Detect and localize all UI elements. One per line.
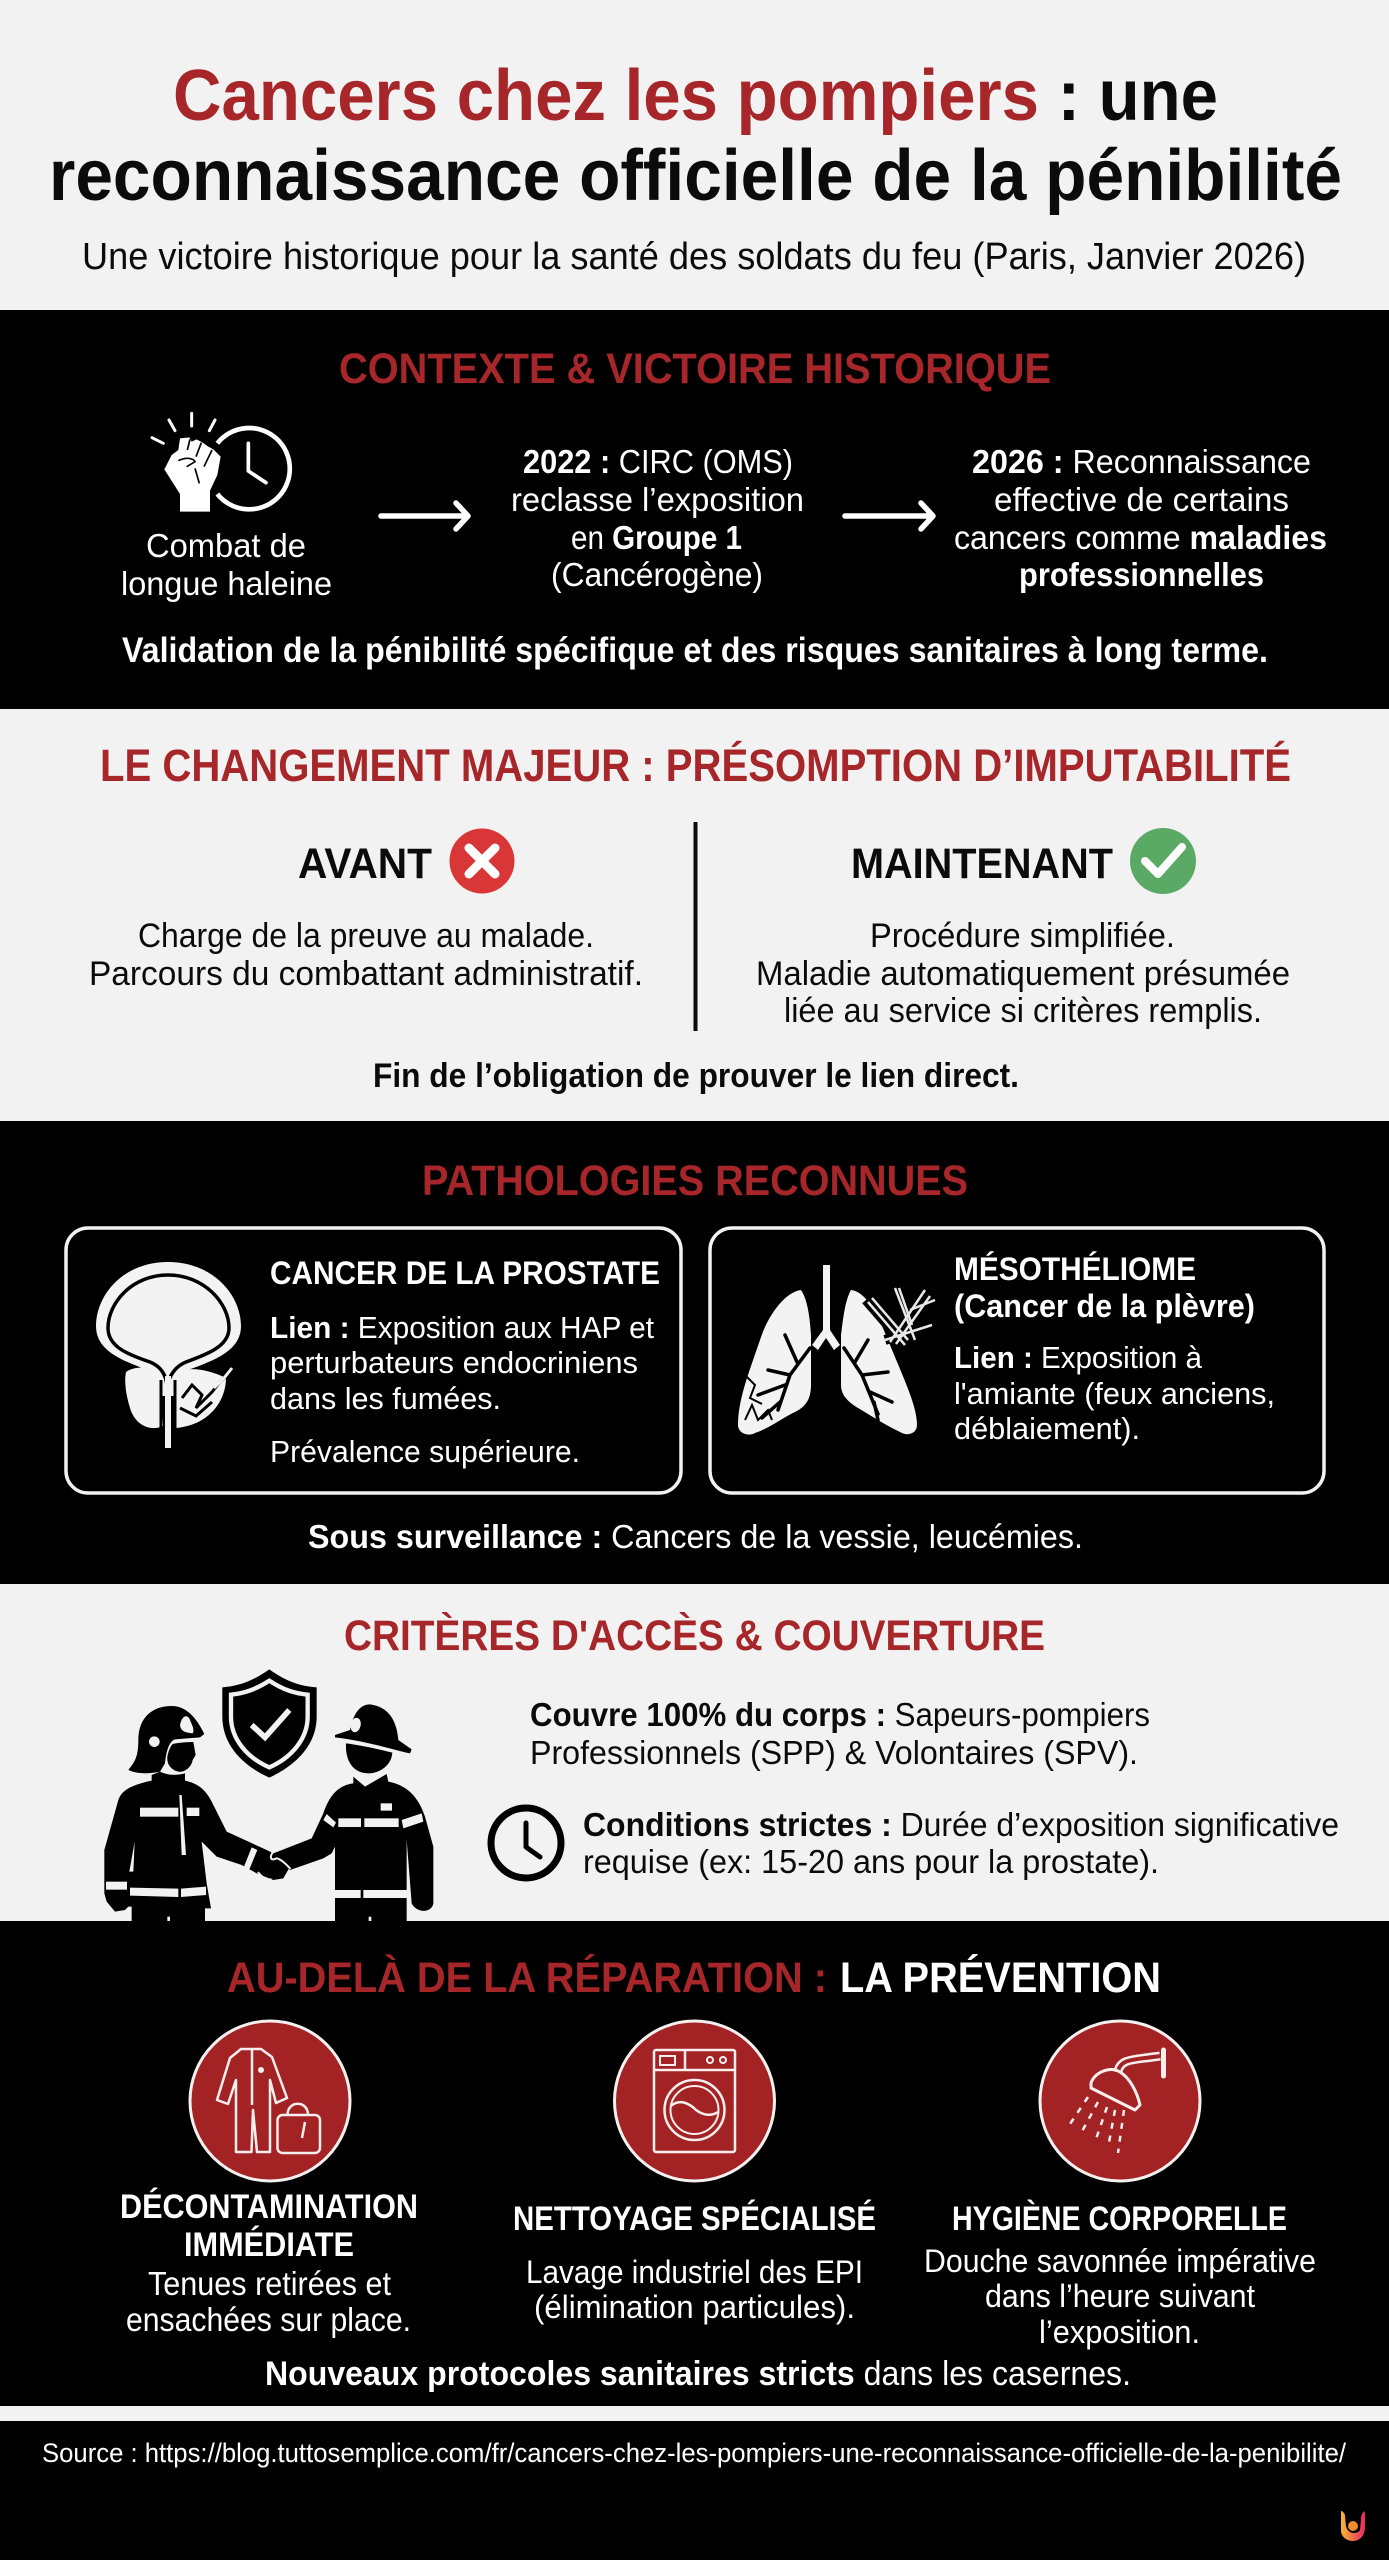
text: validation: Validation de la pénibilité spécifique et des risques sanitaires à long terme. — [122, 631, 1268, 670]
text: source: Source : https://blog.tuttosemplice.com/fr/cancers-chez-les-pompiers-une-reconnaissance-officielle-de-la-penibilite/ — [42, 2438, 1346, 2468]
text: décontamination — [120, 2188, 418, 2338]
panel: contexte et victoire historique — [0, 310, 1389, 709]
text: 2026: effective de certains — [994, 481, 1289, 518]
icon: shower — [1040, 2021, 1200, 2181]
column: avant: Parcours du combattant administratif. — [89, 955, 643, 993]
text: 2022: 2022 : CIRC (OMS) — [523, 443, 793, 480]
icon: shield — [222, 1669, 317, 1778]
text: décontamination: ensachées sur place. — [126, 2301, 411, 2338]
icon: washing machine — [614, 2021, 774, 2181]
text: nettoyage — [513, 2200, 876, 2325]
text: combat de longue haleine: longue haleine — [121, 565, 332, 602]
text: 2026: cancers comme maladies — [954, 519, 1327, 556]
column: maintenant: MAINTENANT — [851, 840, 1113, 888]
text: 2022 — [511, 443, 804, 593]
panel: critères d'accès — [0, 1584, 1389, 1922]
text: combat de longue haleine — [121, 527, 332, 602]
panel: prévention — [0, 1921, 1389, 2406]
card: prostate — [66, 1228, 681, 1493]
column: avant: Charge de la preuve au malade. — [138, 917, 594, 955]
text: mésothéliome: l'amiante (feux anciens, — [954, 1376, 1275, 1411]
text: couvre 100% — [530, 1696, 1150, 1771]
panel: présomption d'imputabilité — [0, 709, 1389, 1121]
text: hygiène: l’exposition. — [1039, 2314, 1200, 2350]
text: décontamination: IMMÉDIATE — [184, 2226, 354, 2264]
heading: prévention — [227, 1954, 1161, 2002]
text: fin de l'obligation: Fin de l’obligation de prouver le lien direct. — [373, 1057, 1019, 1095]
text: nettoyage: (élimination particules). — [534, 2289, 855, 2325]
text: prostate: CANCER DE LA PROSTATE — [270, 1255, 660, 1291]
text: sous surveillance: Sous surveillance : Cancers de la vessie, leucémies. — [308, 1518, 1083, 1555]
heading: prévention: AU-DELÀ DE LA RÉPARATION : — [227, 1954, 827, 2002]
panel: header — [0, 0, 1389, 310]
card: mésothéliome — [710, 1228, 1324, 1493]
text: hygiène — [924, 2200, 1316, 2350]
text: décontamination: Tenues retirées et — [148, 2265, 391, 2302]
heading: contexte: CONTEXTE & VICTOIRE HISTORIQUE — [339, 345, 1051, 393]
text: mésothéliome: Lien : Exposition à — [954, 1340, 1203, 1375]
text: 2022: (Cancérogène) — [551, 556, 763, 593]
heading: prévention: LA PRÉVENTION — [840, 1954, 1161, 2002]
handshake lines — [258, 1852, 290, 1880]
icon: firefighters and shield — [104, 1669, 433, 1922]
text: 2022: en Groupe 1 — [571, 519, 742, 556]
icon: left firefighter — [104, 1706, 290, 1922]
text: couvre 100%: Professionnels (SPP) & Volontaires (SPV). — [530, 1734, 1138, 1771]
icon: right firefighter — [273, 1704, 433, 1922]
subtitle: Une victoire historique pour la santé des soldats du feu (Paris, Janvier 2026) — [82, 236, 1306, 278]
column: hygiène — [924, 2021, 1316, 2350]
text: 2026: 2026 : Reconnaissance — [972, 443, 1311, 480]
icon: fist and clock — [152, 413, 290, 512]
text: hygiène: dans l’heure suivant — [985, 2278, 1255, 2314]
arrow 2 — [845, 503, 933, 529]
text: décontamination: DÉCONTAMINATION — [120, 2188, 418, 2226]
panel: source footer — [0, 2421, 1389, 2560]
column: nettoyage — [513, 2021, 876, 2325]
title: reconnaissance officielle de la pénibilité — [49, 136, 1342, 216]
heading: critères: CRITÈRES D'ACCÈS & COUVERTURE — [344, 1612, 1045, 1660]
column: maintenant: Procédure simplifiée. — [870, 917, 1175, 955]
panel: pathologies reconnues — [0, 1121, 1389, 1584]
title — [49, 56, 1342, 216]
text: 2022: reclasse l’exposition — [511, 481, 804, 518]
text: mésothéliome: MÉSOTHÉLIOME — [954, 1251, 1196, 1287]
text: mésothéliome — [954, 1251, 1275, 1446]
icon: red cross — [450, 828, 514, 894]
separator band — [0, 2406, 1389, 2421]
text: mésothéliome: déblaiement). — [954, 1411, 1140, 1446]
text: mésothéliome: (Cancer de la plèvre) — [954, 1288, 1255, 1324]
text: conditions strictes: requise (ex: 15-20 ans pour la prostate). — [583, 1843, 1159, 1880]
column: maintenant: liée au service si critères remplis. — [784, 992, 1262, 1030]
text: 2026: professionnelles — [1019, 556, 1264, 593]
column: maintenant — [756, 828, 1290, 1030]
column: avant: AVANT — [298, 840, 432, 888]
text: nettoyage: NETTOYAGE SPÉCIALISÉ — [513, 2200, 876, 2238]
heading: pathologies: PATHOLOGIES RECONNUES — [422, 1157, 968, 1205]
text: 2026 — [954, 443, 1327, 593]
icon: clock — [491, 1808, 561, 1878]
text: conditions strictes: Conditions strictes : Durée d’exposition significative — [583, 1806, 1339, 1843]
icon: coverall and bag — [190, 2021, 350, 2181]
text: hygiène: HYGIÈNE CORPORELLE — [952, 2200, 1287, 2238]
icon: green check — [1130, 828, 1196, 894]
text: prostate: Prévalence supérieure. — [270, 1434, 580, 1469]
title: Cancers chez les pompiers : une — [173, 56, 1218, 136]
column: avant — [89, 828, 643, 993]
icon: prostate — [96, 1262, 241, 1448]
text: hygiène: Douche savonnée impérative — [924, 2243, 1316, 2279]
text: prostate: Lien : Exposition aux HAP et — [270, 1310, 654, 1345]
text: combat de longue haleine: Combat de — [146, 527, 306, 564]
icon: lungs — [738, 1265, 935, 1435]
text: nouveaux protocoles: Nouveaux protocoles sanitaires stricts dans les casernes. — [265, 2355, 1131, 2393]
text: couvre 100%: Couvre 100% du corps : Sapeurs-pompiers — [530, 1696, 1150, 1733]
text: conditions strictes — [583, 1806, 1339, 1880]
text: prostate: perturbateurs endocriniens — [270, 1345, 638, 1380]
text: nettoyage: Lavage industriel des EPI — [526, 2254, 863, 2290]
column: maintenant: Maladie automatiquement présumée — [756, 955, 1290, 993]
text: prostate — [270, 1255, 660, 1469]
text: prostate: dans les fumées. — [270, 1381, 501, 1416]
column: décontamination — [120, 2021, 418, 2338]
arrow 1 — [381, 503, 468, 529]
icon: logo — [1341, 2511, 1365, 2541]
